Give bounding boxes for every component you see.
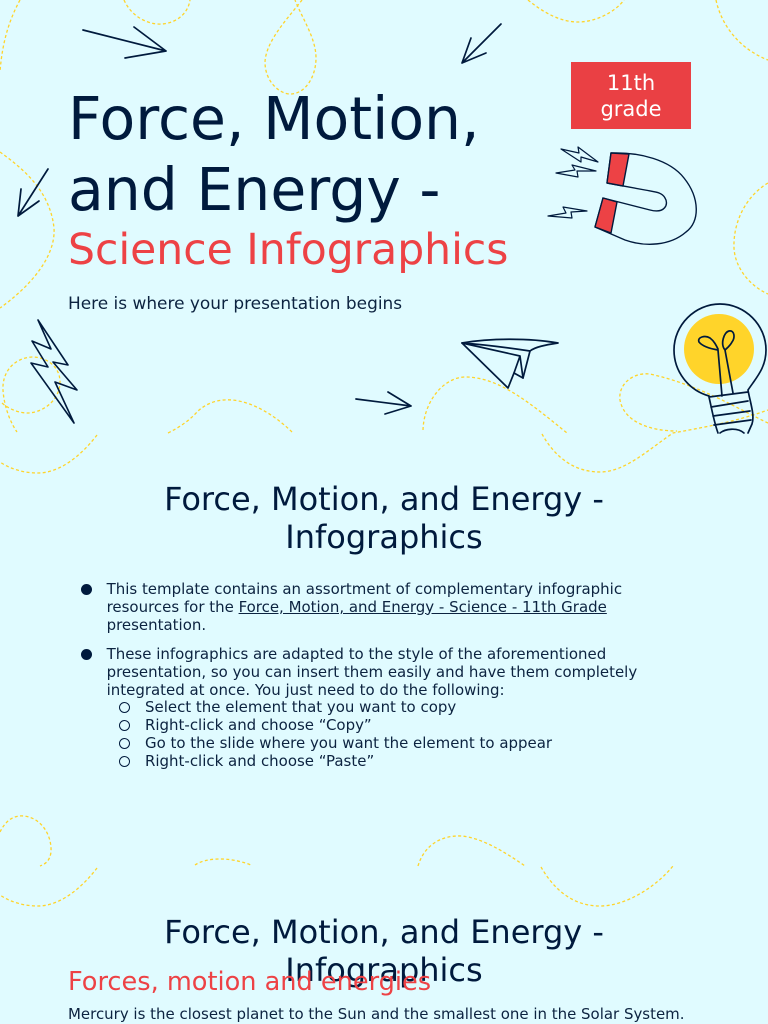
red heading: Forces, motion and energies [68, 967, 431, 997]
sub-list of steps: Select the element that you want to copy [145, 698, 456, 716]
title [68, 85, 480, 224]
icon: light bulb [674, 304, 766, 433]
second section heading: Infographics [285, 951, 483, 989]
icon: arrow left [18, 169, 48, 216]
icon: arrow centre [356, 392, 411, 414]
text: first bullet: presentation. [107, 616, 206, 634]
section heading [164, 480, 604, 556]
icon: magnet [595, 153, 696, 244]
icon: paper plane [462, 339, 558, 388]
bullet list [81, 580, 637, 770]
text: first bullet: This template contains an assortment of complementary infographic [107, 580, 622, 598]
icon: arrow top left [83, 27, 166, 58]
grade badge: 11th [607, 71, 655, 95]
text: first bullet [106, 580, 622, 634]
second section heading [164, 913, 604, 989]
section heading: Infographics [285, 518, 483, 556]
sub-list of steps: Go to the slide where you want the element to appear [145, 734, 552, 752]
sub-list of steps: Right-click and choose “Paste” [145, 752, 374, 770]
grade badge: grade [600, 97, 662, 121]
intro text: Here is where your presentation begins [68, 293, 402, 313]
grade badge [571, 62, 691, 129]
title: and Energy - [68, 156, 440, 224]
subtitle: Science Infographics [68, 226, 508, 275]
text: second bullet [106, 645, 637, 699]
icon: arrow top centre [462, 24, 501, 63]
body text: Mercury is the closest planet to the Sun and the smallest one in the Solar System. [68, 1005, 685, 1023]
sub-list of steps: Right-click and choose “Copy” [145, 716, 372, 734]
text: second bullet: These infographics are adapted to the style of the aforementioned [107, 645, 606, 663]
text: first bullet: resources for the Force, Motion, and Energy - Science - 11th Grade [107, 598, 607, 616]
text: second bullet: presentation, so you can insert them easily and have them completely [107, 663, 637, 681]
text: second bullet: integrated at once. You just need to do the following: [107, 681, 505, 699]
icon: lightning bolt [31, 320, 77, 423]
icon: magnet sparks [548, 147, 598, 218]
section heading: Force, Motion, and Energy - [164, 480, 604, 518]
title: Force, Motion, [68, 85, 480, 153]
bullet: first [81, 584, 92, 595]
second section heading: Force, Motion, and Energy - [164, 913, 604, 951]
bullet: second [81, 649, 92, 660]
sub-list of steps [119, 698, 552, 770]
